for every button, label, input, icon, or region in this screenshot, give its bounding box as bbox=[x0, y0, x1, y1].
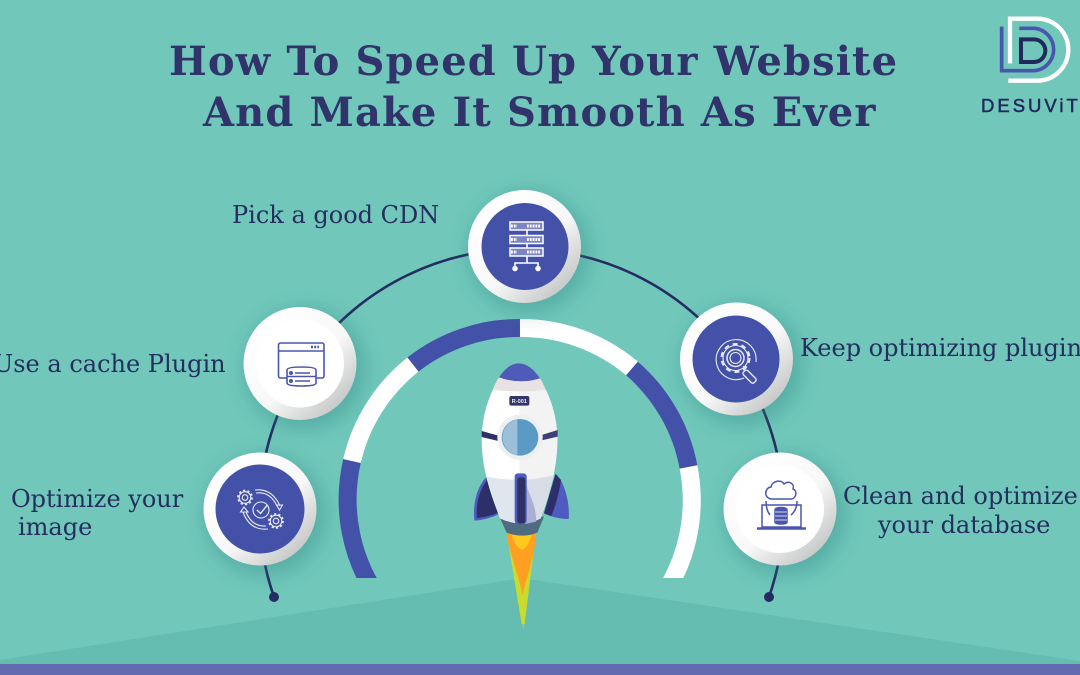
icon: server rack bbox=[510, 222, 543, 270]
straps bbox=[482, 430, 558, 441]
title: And Make It Smooth As Ever bbox=[202, 89, 877, 136]
title: How To Speed Up Your Website bbox=[169, 38, 898, 85]
node: Keep optimizing plugins bbox=[680, 302, 802, 425]
label: Pick a good CDN: Pick a good CDN bbox=[232, 201, 439, 229]
rocket body bbox=[482, 363, 557, 523]
badge: R-001 bbox=[512, 399, 527, 405]
right fin bbox=[544, 474, 569, 519]
label: Clean and optimize your database: your database bbox=[877, 511, 1050, 539]
label: Clean and optimize your database bbox=[843, 482, 1078, 539]
window bbox=[497, 415, 543, 460]
node: Pick a good CDN bbox=[468, 190, 589, 312]
node: Use a cache Plugin bbox=[244, 307, 365, 429]
badge bbox=[509, 396, 529, 406]
icon: browser window with database bbox=[278, 343, 324, 386]
flame bbox=[507, 533, 536, 631]
icon: cloud, laptop and database bbox=[757, 481, 806, 528]
icon: gears and check bbox=[238, 490, 283, 529]
logo: Desuvit bbox=[981, 19, 1080, 116]
label: Clean and optimize your database: Clean and optimize bbox=[843, 482, 1078, 510]
logo: Desuvit: DESUViT bbox=[981, 95, 1080, 116]
segmented speedometer arc bbox=[348, 328, 692, 600]
label: Optimize your image: image bbox=[18, 513, 92, 541]
nose cap bbox=[499, 363, 540, 381]
left fin bbox=[474, 476, 500, 521]
thin connector arc bbox=[260, 249, 783, 602]
icon: magnifier over gear bbox=[716, 340, 757, 384]
node: Optimize your image bbox=[204, 452, 325, 575]
rocket bbox=[474, 363, 569, 631]
label: Optimize your image bbox=[11, 485, 184, 541]
nozzle bbox=[499, 517, 544, 536]
hill bbox=[0, 580, 1080, 665]
center fin bbox=[515, 473, 527, 524]
title bbox=[169, 38, 898, 136]
node: Clean and optimize your database bbox=[724, 452, 845, 575]
bottom bar bbox=[0, 664, 1080, 675]
label: Optimize your image: Optimize your bbox=[11, 485, 184, 513]
